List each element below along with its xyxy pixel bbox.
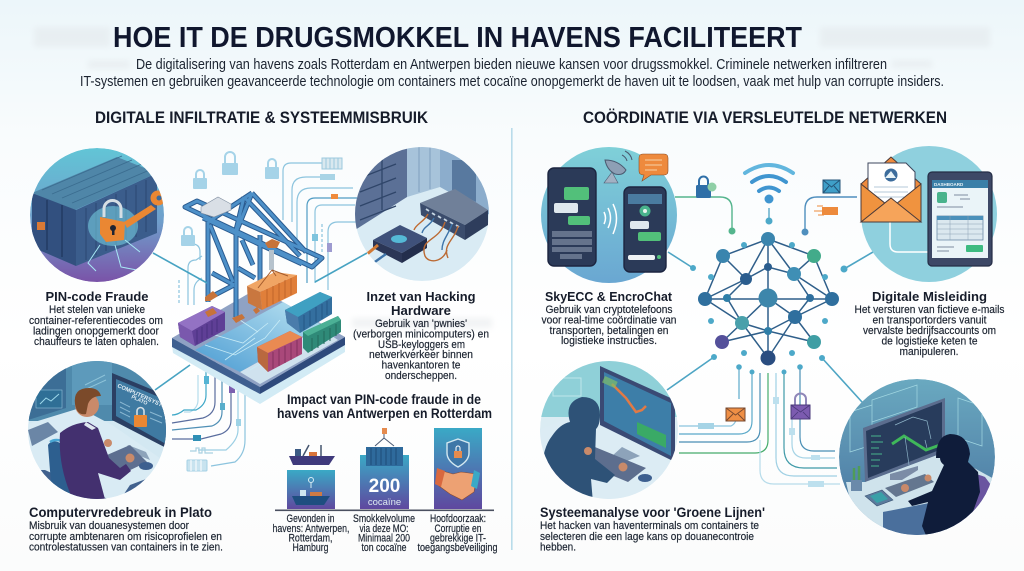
label: gevonden in havens: havens: Antwerpen, <box>272 523 350 535</box>
label: inzet van hacking hardware: Inzet van Hacking <box>366 289 476 304</box>
icon: orange envelope <box>726 408 745 421</box>
bar: 200 cocaine <box>360 428 409 509</box>
panel: digitale infiltratie <box>28 147 498 554</box>
label: digitale misleiding <box>854 289 1005 358</box>
platform <box>172 288 345 404</box>
icon: lock <box>696 176 716 198</box>
label: smokkelvolume: ton cocaïne <box>362 542 406 554</box>
heading: coordinatie: COÖRDINATIE VIA VERSLEUTELDE NETWERKEN <box>583 108 947 127</box>
label: hoofdoorzaak: Hoofdoorzaak: <box>430 513 486 525</box>
title: HOE IT DE DRUGSMOKKEL IN HAVENS FACILITEERT <box>113 22 802 54</box>
icon: purple lock <box>791 394 810 419</box>
illustration: crane and network wiring <box>172 152 360 471</box>
label: inzet van hacking hardware <box>353 289 489 382</box>
label: skyecc encrochat: transporten, betalingen en <box>550 325 668 337</box>
icon: email and tablet: DASHBOARD <box>934 182 964 187</box>
icon: container with padlock <box>30 148 166 282</box>
label: computervredebreuk in plato: controlestatussen van containers in te zien. <box>29 542 223 554</box>
icon: envelope <box>823 180 840 193</box>
icon: hacker at terminal <box>839 379 996 540</box>
crane <box>185 193 322 317</box>
bar: 200 cocaine: 200 <box>369 476 400 497</box>
label: skyecc encrochat <box>542 289 676 347</box>
heading: impact: Impact van PIN-code fraude in de <box>287 392 481 407</box>
label: hoofdoorzaak <box>418 513 498 554</box>
label: hoofdoorzaak: Corruptie en <box>434 523 482 535</box>
label: computervredebreuk in plato <box>29 504 223 554</box>
label: computervredebreuk in plato: Computervredebreuk in Plato <box>29 504 212 520</box>
panel: versleutelde netwerken <box>540 146 1005 554</box>
label: digitale misleiding: en transportorders vanuit <box>872 314 987 326</box>
heading: impact: havens van Antwerpen en Rotterdam <box>277 406 492 421</box>
label: digitale misleiding: Digitale Misleiding <box>872 289 987 304</box>
label: digitale misleiding: manipuleren. <box>900 346 958 358</box>
label: gevonden in havens: Rotterdam, <box>288 532 332 544</box>
label: systeemanalyse groene lijnen: selecteren die een lage kans op douanecontroie <box>540 531 754 543</box>
label: pin-code fraude: PIN-code Fraude <box>46 289 148 304</box>
label: skyecc encrochat: voor real-time coördinatie van <box>542 314 676 326</box>
label: pin-code fraude: ladingen onopgemerkt door <box>33 326 159 338</box>
label: pin-code fraude: Het stelen van unieke <box>49 304 145 316</box>
label: inzet van hacking hardware: Hardware <box>391 303 451 318</box>
icon: email and tablet <box>861 146 997 282</box>
icon: computervredebreuk in plato: PLATO <box>130 394 148 407</box>
chart: impact <box>272 428 498 554</box>
icon: computervredebreuk in plato <box>28 361 166 499</box>
label: systeemanalyse groene lijnen: Het hacken van haventerminals om containers te <box>540 520 759 532</box>
hanging container <box>247 270 297 310</box>
icon: phones <box>541 147 677 283</box>
heading: digitale infiltratie: DIGITALE INFILTRATIE & SYSTEEMMISBRUIK <box>95 109 428 127</box>
icon: wifi <box>745 165 793 204</box>
label: pin-code fraude: chauffeurs te laten ophalen. <box>34 336 159 348</box>
label: pin-code fraude <box>29 289 163 348</box>
label: pin-code fraude: container-referentiecodes om <box>29 315 163 327</box>
bar: 200 cocaine: cocaïne <box>368 497 401 508</box>
label: smokkelvolume <box>353 513 415 554</box>
icon: hacker analysing routes <box>540 361 680 503</box>
heading: impact <box>277 392 492 421</box>
label: computervredebreuk in plato: corrupte ambtenaren om risicoprofielen en <box>29 531 222 543</box>
containers on deck <box>178 292 341 372</box>
icon: hacking hardware <box>355 147 490 281</box>
label: inzet van hacking hardware: (verborgen minicomputers) en <box>353 328 489 340</box>
intro text <box>80 57 944 90</box>
label: hoofdoorzaak: gebrekkige IT- <box>430 532 486 544</box>
label: digitale misleiding: vervalste bedrijfsaccounts om <box>863 325 996 337</box>
label: systeemanalyse groene lijnen: Systeemanalyse voor 'Groene Lijnen' <box>540 504 765 520</box>
label: gevonden in havens <box>272 513 350 554</box>
bar: havens <box>287 445 335 509</box>
label: inzet van hacking hardware: netwerkverkeer binnen <box>369 349 473 361</box>
label: skyecc encrochat: Gebruik van cryptotelefoons <box>546 304 673 316</box>
intro text: De digitalisering van havens zoals Rotterdam en Antwerpen bieden nieuwe kansen voor drugssmokkel. Criminele netwerken infiltreren <box>136 57 887 73</box>
label: digitale misleiding: Het versturen van fictieve e-mails <box>854 304 1005 316</box>
label: hoofdoorzaak: toegangsbeveiliging <box>418 542 498 554</box>
label: systeemanalyse groene lijnen <box>540 504 765 554</box>
label: systeemanalyse groene lijnen: hebben. <box>540 542 576 554</box>
label: inzet van hacking hardware: Gebruik van 'pwnies' <box>375 318 467 330</box>
icon: computervredebreuk in plato: COMPUTERSYSTEEM <box>116 383 174 414</box>
label: skyecc encrochat: logistieke instructies. <box>561 335 657 347</box>
diagram: encrypted network <box>667 165 873 487</box>
label: gevonden in havens: Hamburg <box>292 542 328 554</box>
label: gevonden in havens: Gevonden in <box>286 513 334 525</box>
label: smokkelvolume: Smokkelvolume <box>353 513 415 525</box>
label: computervredebreuk in plato: Misbruik van douanesystemen door <box>29 520 189 532</box>
label: smokkelvolume: Minimaal 200 <box>358 532 410 544</box>
bar: hoofdoorzaak <box>434 428 482 509</box>
label: inzet van hacking hardware: havenkantoren te <box>382 360 460 372</box>
label: skyecc encrochat: SkyECC & EncroChat <box>545 289 673 304</box>
label: inzet van hacking hardware: USB-keyloggers em <box>378 339 465 351</box>
label: smokkelvolume: via deze MO: <box>360 523 408 535</box>
label: inzet van hacking hardware: onderscheppen. <box>385 370 457 382</box>
label: digitale misleiding: de logistieke keten te <box>882 336 978 348</box>
